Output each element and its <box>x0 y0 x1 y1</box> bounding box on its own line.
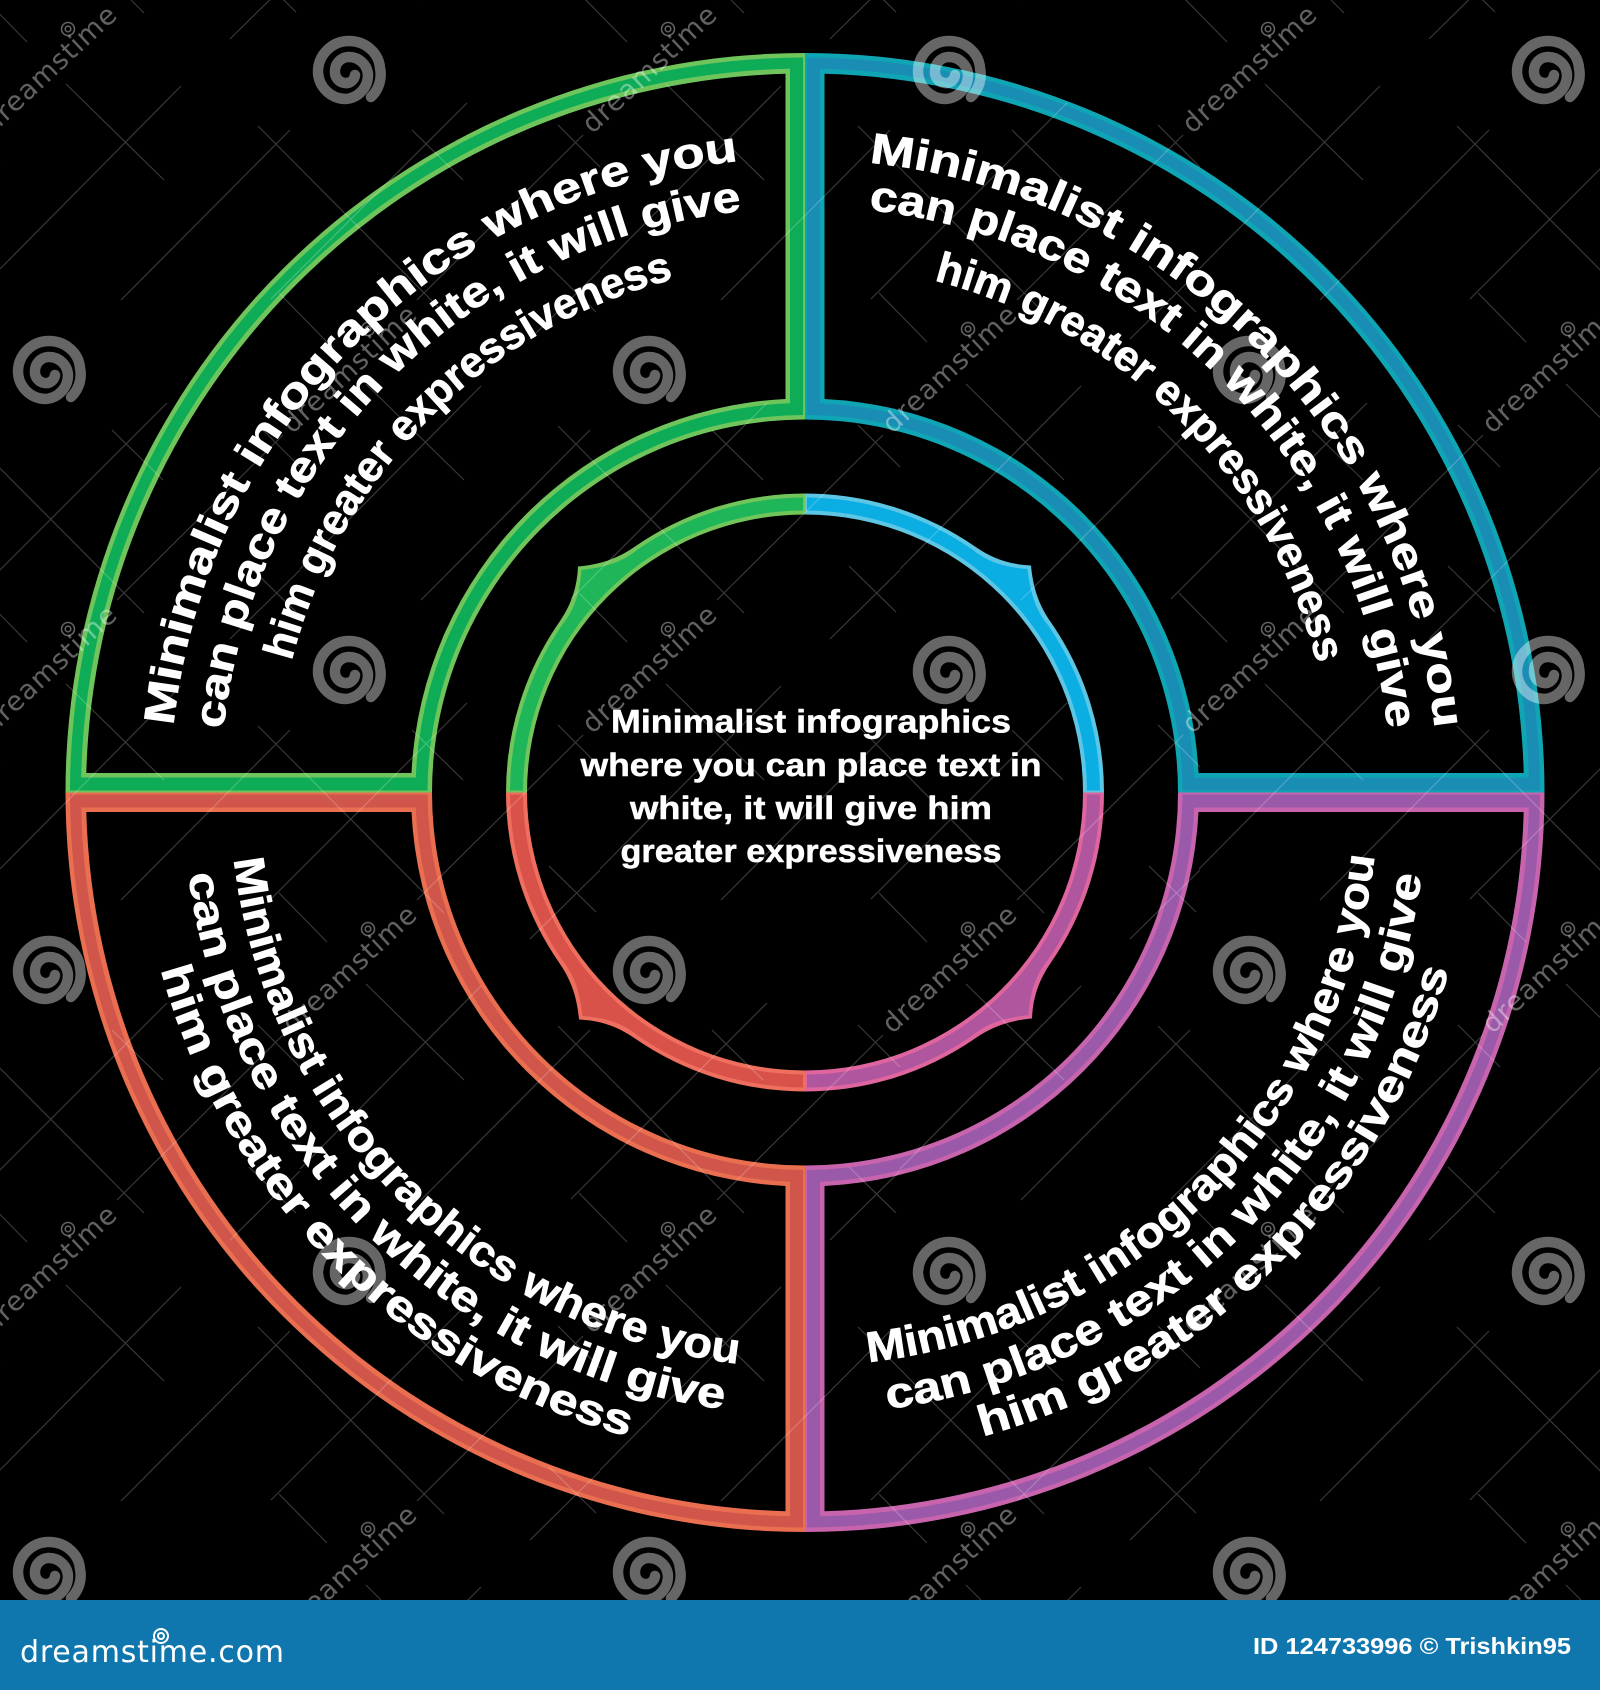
center text block: where you can place text in <box>579 747 1042 783</box>
watermark wordmarks: dreamstime <box>876 900 1023 1040</box>
footer bar <box>0 1600 1600 1690</box>
panel: bottom-left red sector <box>66 792 805 1532</box>
watermark wordmarks: dreamstime <box>276 300 423 440</box>
curved text: top-right: can place text in white, it will give <box>872 188 1410 726</box>
center text block: Minimalist infographics <box>611 704 1011 740</box>
inner ring: blue quadrant with cusp <box>805 494 1104 792</box>
center text block: greater expressiveness <box>620 833 1002 869</box>
curved text: bottom-left: him greater expressiveness <box>161 964 630 1434</box>
watermark wordmarks: dreamstime <box>576 600 723 740</box>
center text block <box>579 704 1042 869</box>
panel: bottom-right purple sector <box>805 792 1544 1532</box>
footer image id and author: ID 124733996 © Trishkin95 <box>1253 1633 1571 1659</box>
panel: top-left green sector <box>65 53 805 792</box>
center text block: white, it will give him <box>629 790 992 826</box>
watermark wordmarks: dreamstime <box>1176 600 1323 740</box>
curved text: bottom-right: him greater expressiveness <box>976 967 1447 1436</box>
curved text: bottom-left: can place text in white, it will give <box>190 874 724 1408</box>
curved text: top-left: can place text in white, it will give <box>202 189 740 726</box>
footer logo wordmark: dreamstime.com <box>20 1635 284 1670</box>
watermark wordmarks: dreamstime <box>1176 0 1323 140</box>
curved text: bottom-right: Minimalist infographics where you <box>866 856 1375 1362</box>
curved text: top-right: Minimalist infographics where you <box>872 133 1458 726</box>
curved text: top-left: Minimalist infographics where you <box>144 138 736 723</box>
curved text: bottom-left: Minimalist infographics where you <box>234 858 738 1364</box>
watermark wordmarks: dreamstime <box>276 1500 423 1640</box>
watermark wordmarks: dreamstime <box>576 1200 723 1340</box>
watermark wordmarks: dreamstime <box>1176 1200 1323 1340</box>
watermark wordmarks: dreamstime <box>876 1500 1023 1640</box>
curved text: top-right: him greater expressiveness <box>936 250 1338 661</box>
curved text: top-left: him greater expressiveness <box>262 258 671 659</box>
watermark wordmarks: dreamstime <box>576 0 723 140</box>
curved text: bottom-right: can place text in white, it will give <box>887 874 1421 1408</box>
inner ring: red quadrant with cusp <box>506 792 805 1092</box>
panel: top-right teal sector <box>805 53 1544 792</box>
inner ring: green quadrant with cusp <box>506 494 805 792</box>
watermark wordmarks: dreamstime <box>876 300 1023 440</box>
inner ring: purple quadrant with cusp <box>805 792 1104 1092</box>
watermark wordmarks: dreamstime <box>276 900 423 1040</box>
footer logo spiral icon <box>154 1629 168 1643</box>
